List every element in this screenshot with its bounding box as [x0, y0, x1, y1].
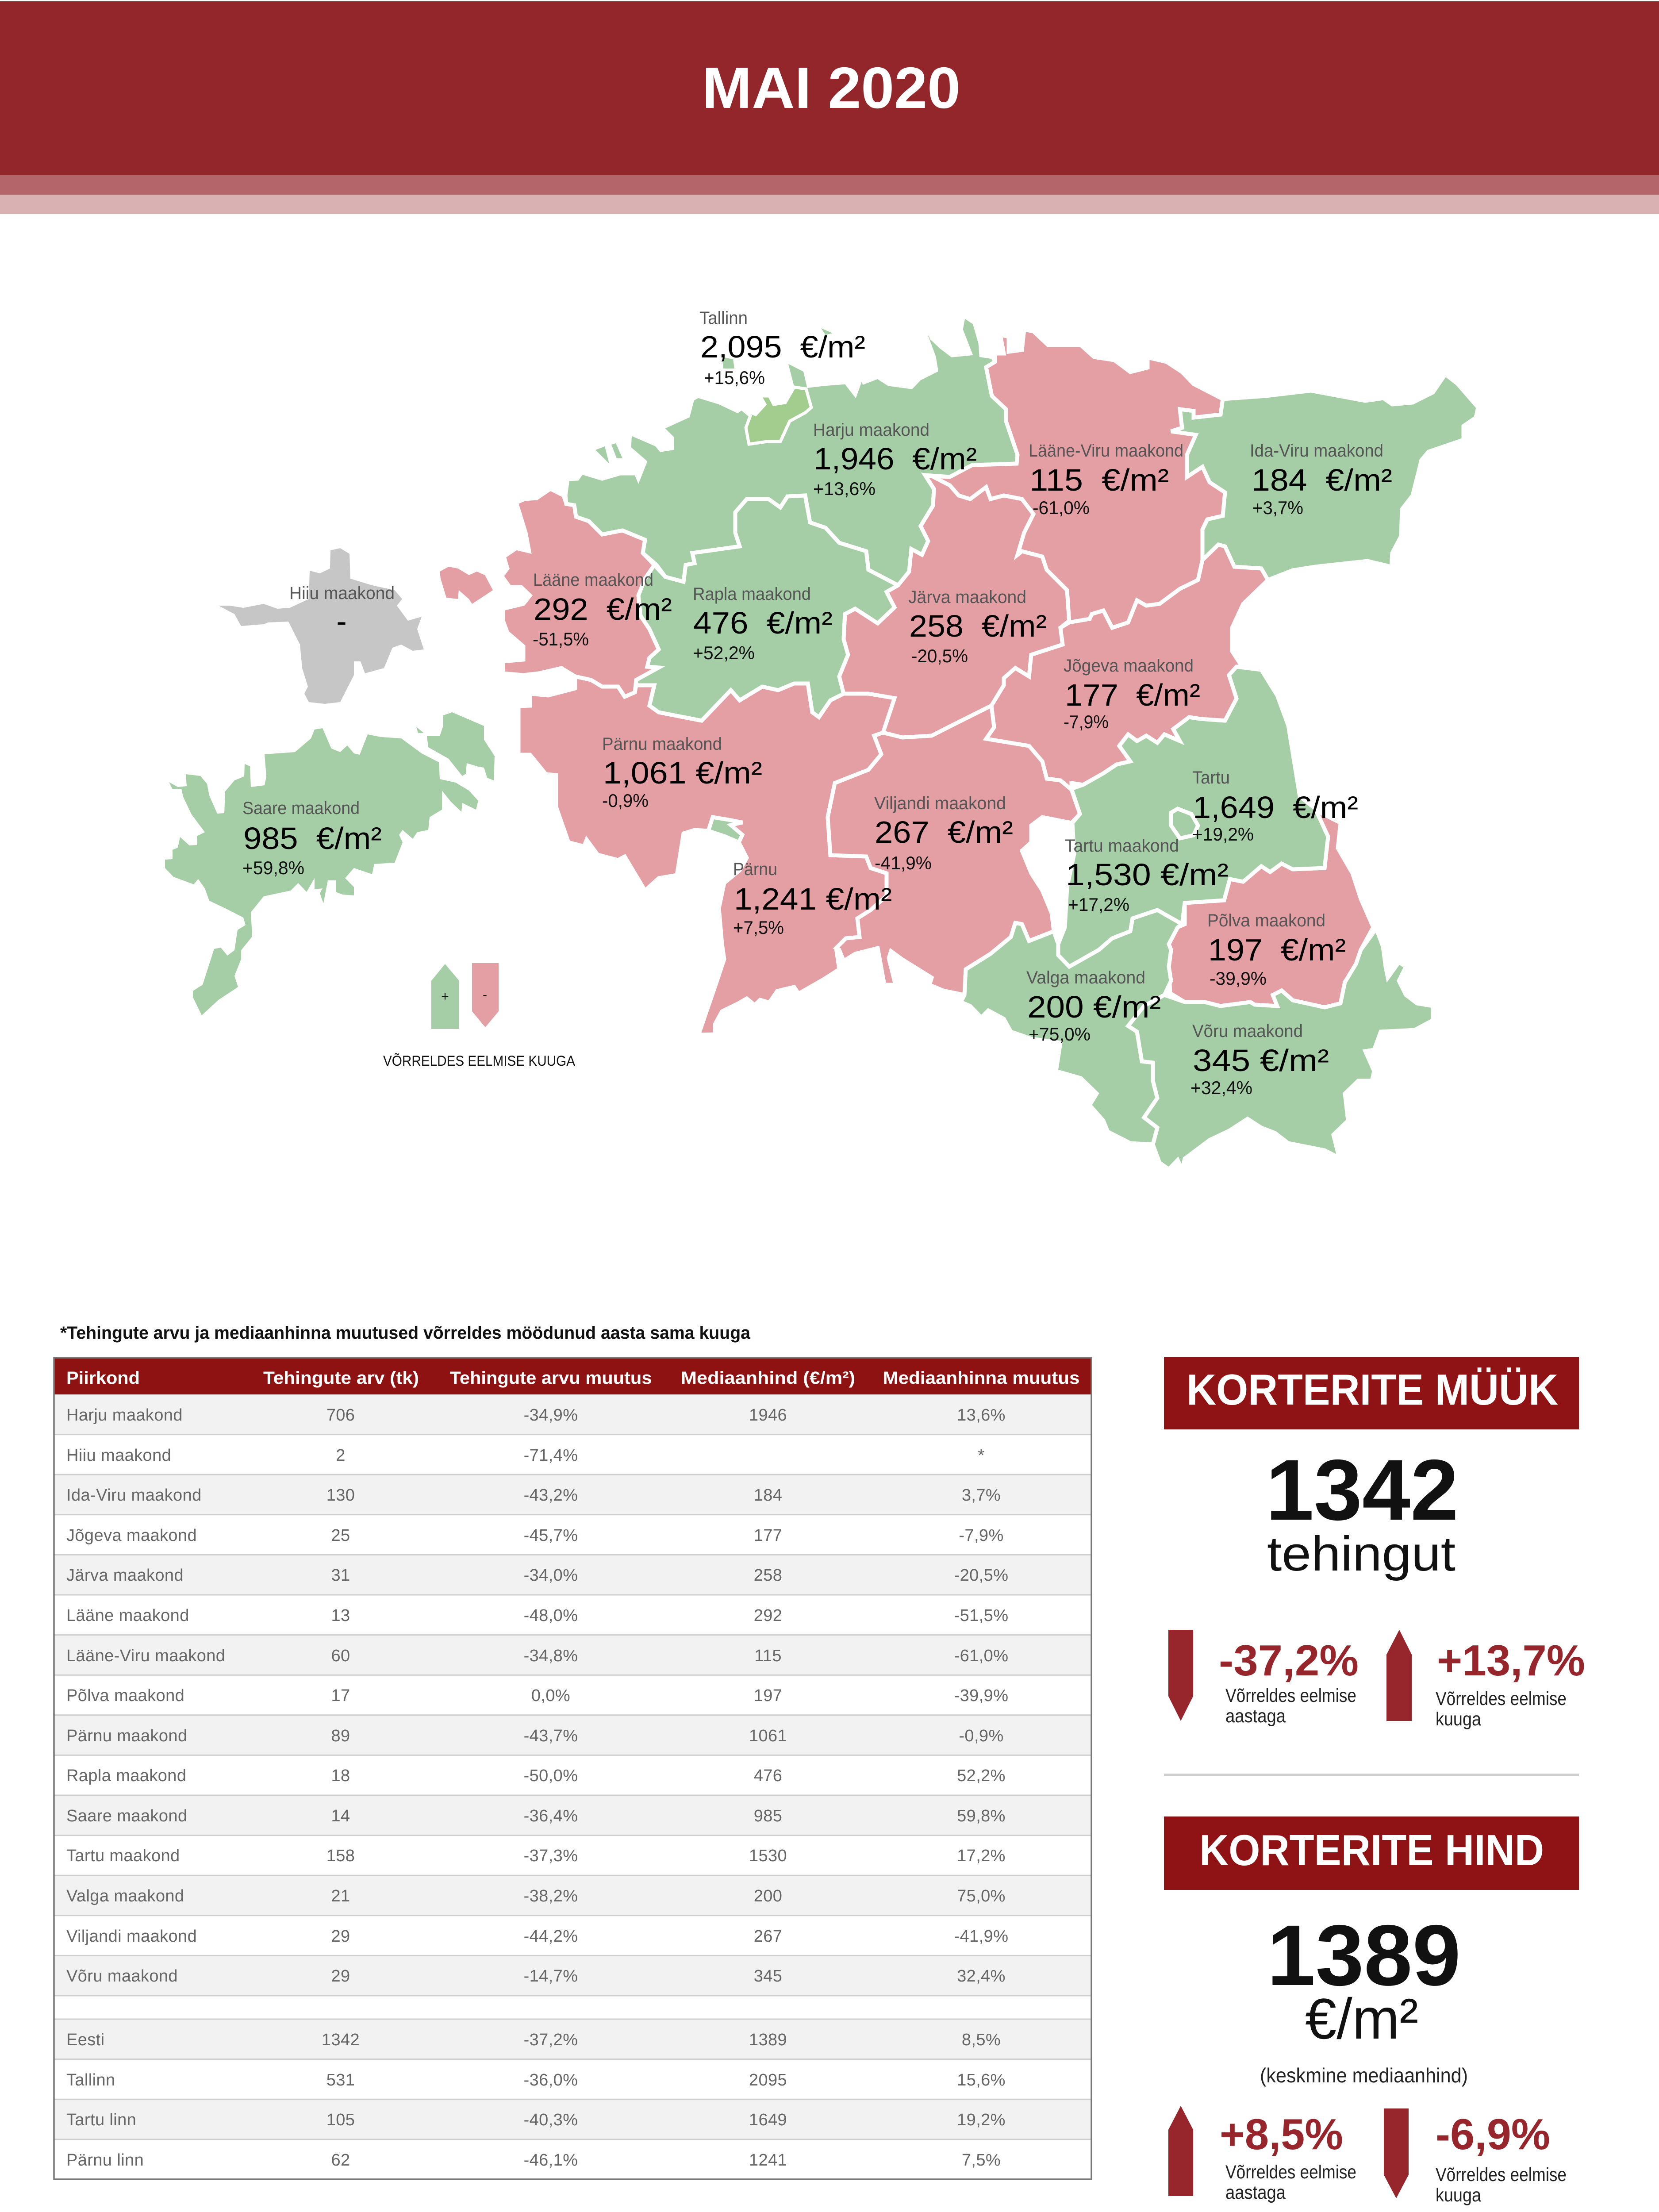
heading: KORTERITE MÜÜK: KORTERITE MÜÜK: [1187, 1365, 1558, 1414]
row: Harju maakond: 13,6%: [957, 1406, 1006, 1425]
map label: Valga: +75,0%: [1029, 1024, 1091, 1045]
stat: yearly change: Võrreldes eelmise: [1225, 1685, 1356, 1706]
row: Jõgeva maakond: Jõgeva maakond: [66, 1526, 197, 1545]
row: Pärnu maakond: -43,7%: [524, 1727, 578, 1745]
row: Rapla maakond: 476: [754, 1767, 782, 1785]
map label: Valga: [1026, 968, 1161, 1045]
row: Tartu maakond: 1530: [749, 1847, 787, 1865]
row: Hiiu maakond: Hiiu maakond: [66, 1446, 171, 1465]
icon: plus arrow: [431, 964, 459, 1029]
map label: Pärnu: 1,241 €/m²: [734, 882, 892, 916]
row: Viljandi maakond: 29: [331, 1927, 350, 1946]
row: Ida-Viru maakond: 130: [326, 1486, 355, 1505]
stat: yearly change: [1219, 1636, 1359, 1727]
row: Rapla maakond: 18: [331, 1767, 350, 1785]
row: Hiiu maakond: *: [978, 1446, 985, 1465]
county: Pärnu city: [708, 817, 742, 842]
row: Põlva maakond: [66, 1686, 1008, 1705]
map label: Tallinn: 2,095 €/m²: [700, 330, 865, 364]
map label: Valga: 200 €/m²: [1027, 990, 1161, 1024]
map label: Lääne-Viru: -61,0%: [1033, 497, 1090, 518]
stat: monthly change: kuuga: [1436, 1709, 1481, 1730]
map label: Põlva: 197 €/m²: [1208, 933, 1346, 967]
table frame: [54, 1358, 1091, 2179]
map label: Rapla: [693, 584, 833, 663]
icon: down arrow monthly: [1384, 2108, 1409, 2198]
map label: Saare: 985 €/m²: [243, 821, 382, 856]
row: Tallinn: 531: [326, 2071, 355, 2089]
row: Valga maakond: Valga maakond: [66, 1887, 184, 1905]
caption: keskmine mediaanhind: (keskmine mediaanhind): [1260, 2064, 1468, 2087]
map label: Jõgeva: Jõgeva maakond: [1064, 656, 1194, 676]
stat: yearly change: -37,2%: [1219, 1636, 1359, 1685]
map label: Pärnu: +7,5%: [733, 917, 784, 938]
county: Rapla: [636, 495, 898, 721]
map label: Hiiu: Hiiu maakond: [289, 584, 395, 603]
row: Eesti: 8,5%: [962, 2031, 1001, 2049]
row: Pärnu maakond: -0,9%: [959, 1727, 1004, 1745]
row: Valga maakond: -38,2%: [524, 1887, 578, 1905]
icon: up arrow monthly: [1386, 1630, 1412, 1721]
caption: tehingut: tehingut: [1267, 1527, 1455, 1581]
map label: Jõgeva: 177 €/m²: [1065, 678, 1200, 712]
map label: Tartu maakond: 1,530 €/m²: [1066, 857, 1229, 892]
map label: Viljandi: [874, 794, 1013, 873]
row: Pärnu linn: Pärnu linn: [66, 2151, 144, 2170]
title: MAI 2020: [702, 55, 960, 120]
row: Järva maakond: -20,5%: [954, 1566, 1008, 1585]
map label: Viljandi: Viljandi maakond: [874, 794, 1006, 813]
map label: Harju: Harju maakond: [813, 420, 929, 440]
county: Hiiu: [219, 548, 424, 704]
map label: Rapla: Rapla maakond: [693, 584, 811, 604]
legend minus sign: -: [483, 987, 487, 1002]
map label: Järva: -20,5%: [911, 645, 968, 666]
table row backgrounds: [54, 1394, 1091, 2139]
row: Järva maakond: -34,0%: [524, 1566, 578, 1585]
row: Lääne-Viru maakond: Lääne-Viru maakond: [66, 1647, 225, 1665]
map label: Pärnu: Pärnu: [733, 860, 777, 879]
row: Saare maakond: [66, 1807, 1006, 1825]
row: Eesti: Eesti: [66, 2031, 104, 2049]
row: Põlva maakond: Põlva maakond: [66, 1686, 184, 1705]
map label: Harju: +13,6%: [813, 478, 876, 499]
icon: up arrow yearly: [1168, 2106, 1193, 2196]
row: Tartu maakond: 17,2%: [957, 1847, 1006, 1865]
county: Pärnu: [518, 676, 895, 1035]
map label: Tartu: Tartu: [1192, 768, 1230, 787]
county: Viljandi: [828, 706, 1080, 995]
map label: Tartu maakond: Tartu maakond: [1065, 836, 1179, 856]
data table: [54, 1358, 1091, 2179]
row: Rapla maakond: Rapla maakond: [66, 1767, 186, 1785]
map label: Lääne: -51,5%: [533, 629, 589, 649]
row: Tartu maakond: Tartu maakond: [66, 1847, 180, 1865]
table footnote: *Tehingute arvu ja mediaanhinna muutused võrreldes möödunud aasta sama kuuga: [60, 1323, 751, 1343]
row: Harju maakond: Harju maakond: [66, 1406, 183, 1425]
map legend: [383, 963, 576, 1069]
row: Lääne-Viru maakond: 115: [754, 1647, 782, 1665]
row: Põlva maakond: 17: [331, 1686, 350, 1705]
stat: monthly change: +13,7%: [1437, 1636, 1585, 1685]
map label: Jõgeva: [1064, 656, 1200, 732]
table header: Tehingute arv (tk): [263, 1368, 419, 1388]
map label: Lääne-Viru: Lääne-Viru maakond: [1029, 441, 1183, 461]
row: Järva maakond: Järva maakond: [66, 1566, 184, 1585]
row: Lääne maakond: [66, 1606, 1008, 1625]
row: Rapla maakond: [66, 1767, 1006, 1785]
row: Tartu maakond: [66, 1847, 1006, 1865]
row: Tartu maakond: 158: [326, 1847, 355, 1865]
map label: Tallinn: +15,6%: [704, 367, 765, 388]
map label: Rapla: +52,2%: [693, 642, 755, 663]
map label: Viljandi: -41,9%: [875, 853, 932, 873]
stat: yearly price change: Võrreldes eelmise: [1225, 2162, 1356, 2183]
row: Hiiu maakond: -71,4%: [524, 1446, 578, 1465]
row: Ida-Viru maakond: -43,2%: [524, 1486, 578, 1505]
row: Pärnu linn: -46,1%: [524, 2151, 578, 2170]
row: Valga maakond: [66, 1887, 1006, 1905]
row: Viljandi maakond: 267: [754, 1927, 782, 1946]
map label: Põlva: Põlva maakond: [1207, 911, 1325, 930]
row: Hiiu maakond: [66, 1446, 985, 1465]
row: Võru maakond: -14,7%: [524, 1967, 578, 1985]
row: Valga maakond: 200: [754, 1887, 782, 1905]
panel: apartment price: [1164, 1816, 1579, 2206]
row: Lääne-Viru maakond: -61,0%: [954, 1647, 1008, 1665]
row: Tallinn: 2095: [749, 2071, 787, 2089]
map label: Pärnu: [733, 860, 892, 938]
row: Pärnu maakond: 89: [331, 1727, 350, 1745]
map label: Saare: [242, 799, 382, 878]
row: Eesti: -37,2%: [524, 2031, 578, 2049]
map label: Lääne: [533, 570, 672, 649]
row: Saare maakond: 14: [331, 1807, 350, 1825]
row: Võru maakond: 29: [331, 1967, 350, 1985]
table header: [54, 1358, 1091, 1394]
map label: Valga: Valga maakond: [1026, 968, 1145, 987]
row: Pärnu maakond: [66, 1727, 1004, 1745]
map label: Järva: Järva maakond: [908, 588, 1026, 607]
map label: Viljandi: 267 €/m²: [875, 815, 1013, 849]
row: Lääne maakond: -48,0%: [524, 1606, 578, 1625]
map label: Võru: Võru maakond: [1192, 1022, 1303, 1041]
county: Lääne: [440, 489, 659, 697]
row: Jõgeva maakond: 25: [331, 1526, 350, 1545]
map label: Võru: +32,4%: [1190, 1077, 1252, 1098]
row: Eesti: [66, 2031, 1001, 2049]
map label: Võru: [1190, 1022, 1329, 1098]
map label: Põlva: -39,9%: [1210, 968, 1267, 989]
row: Saare maakond: 59,8%: [957, 1807, 1006, 1825]
row: Lääne maakond: Lääne maakond: [66, 1606, 189, 1625]
row: Harju maakond: -34,9%: [524, 1406, 578, 1425]
row: Saare maakond: 985: [754, 1807, 782, 1825]
row: Tallinn: [66, 2071, 1006, 2089]
map label: Tartu: 1,649 €/m²: [1193, 790, 1358, 825]
row: Pärnu linn: 7,5%: [962, 2151, 1001, 2170]
map label: Pärnu maakond: [602, 734, 762, 811]
county: Võru: [1128, 929, 1433, 1170]
row: Pärnu linn: [66, 2151, 1001, 2170]
map label: Ida-Viru: 184 €/m²: [1252, 463, 1392, 497]
legend caption: VÕRRELDES EELMISE KUUGA: [383, 1053, 576, 1069]
row: Ida-Viru maakond: Ida-Viru maakond: [66, 1486, 202, 1505]
row: Järva maakond: [66, 1566, 1008, 1585]
row: Harju maakond: 1946: [749, 1406, 787, 1425]
stat: yearly change: aastaga: [1225, 1705, 1286, 1727]
row: Harju maakond: 706: [326, 1406, 355, 1425]
row: Eesti: 1342: [322, 2031, 360, 2049]
table header: Tehingute arvu muutus: [449, 1368, 652, 1388]
map label: Võru: 345 €/m²: [1193, 1043, 1329, 1078]
row: Tartu linn: [66, 2111, 1006, 2129]
row: Rapla maakond: -50,0%: [524, 1767, 578, 1785]
row: Põlva maakond: 197: [754, 1686, 782, 1705]
county: Ida-Viru: [1171, 374, 1478, 580]
row: Viljandi maakond: -44,2%: [524, 1927, 578, 1946]
row: Tartu linn: Tartu linn: [66, 2111, 136, 2129]
row: Järva maakond: 31: [331, 1566, 350, 1585]
map label: Tartu: +19,2%: [1192, 824, 1254, 845]
table header: Mediaanhind (€/m²): [681, 1368, 855, 1388]
map label: Pärnu maakond: Pärnu maakond: [602, 734, 722, 754]
row: Tallinn: -36,0%: [524, 2071, 578, 2089]
county: Tartu: [1058, 667, 1328, 967]
row: Jõgeva maakond: [66, 1526, 1004, 1545]
row: Pärnu linn: 1241: [749, 2151, 787, 2170]
map label: Hiiu: [289, 584, 395, 638]
stat: monthly change: Võrreldes eelmise: [1436, 1688, 1567, 1709]
map label: Järva: [908, 588, 1047, 666]
map label: Põlva: [1207, 911, 1346, 989]
row: Rapla maakond: 52,2%: [957, 1767, 1006, 1785]
stat: monthly price change: kuuga: [1436, 2185, 1481, 2206]
row: Tartu maakond: -37,3%: [524, 1847, 578, 1865]
stat: yearly price change: +8,5%: [1220, 2110, 1343, 2158]
row: Lääne-Viru maakond: 60: [331, 1647, 350, 1665]
row: Võru maakond: [66, 1967, 1006, 1985]
row: Lääne maakond: 13: [331, 1606, 350, 1625]
map label: Saare: +59,8%: [242, 857, 304, 878]
map label: Harju: [813, 420, 977, 499]
stat: monthly price change: [1436, 2110, 1567, 2206]
county: Järva: [839, 475, 1069, 737]
map label: Lääne-Viru: [1029, 441, 1183, 518]
row: Tartu linn: 19,2%: [957, 2111, 1006, 2129]
map label: Ida-Viru: Ida-Viru maakond: [1250, 441, 1383, 461]
row: Eesti: 1389: [749, 2031, 787, 2049]
row: Saare maakond: -36,4%: [524, 1807, 578, 1825]
map label: Jõgeva: -7,9%: [1064, 711, 1109, 732]
row: Järva maakond: 258: [754, 1566, 782, 1585]
stat: yearly price change: [1220, 2110, 1356, 2203]
row: Tallinn: Tallinn: [66, 2071, 115, 2089]
stat: monthly change: [1436, 1636, 1585, 1730]
big number 1389: 1389: [1267, 1907, 1461, 2004]
panel: apartment sales: [1164, 1357, 1585, 1730]
row: Tartu linn: 1649: [749, 2111, 787, 2129]
map label: Rapla: 476 €/m²: [693, 606, 833, 640]
icon: down arrow yearly: [1168, 1630, 1193, 1721]
county: Valga: [961, 910, 1182, 1144]
map of Estonia: [165, 315, 1478, 1170]
row: Tartu linn: 105: [326, 2111, 355, 2129]
map label: Lääne: Lääne maakond: [533, 570, 653, 590]
heading: KORTERITE HIND: KORTERITE HIND: [1199, 1826, 1544, 1874]
county: Saare: [165, 712, 495, 1015]
stat: monthly price change: Võrreldes eelmise: [1436, 2164, 1567, 2185]
big number 1342: 1342: [1266, 1442, 1459, 1538]
map label: Ida-Viru: [1250, 441, 1392, 518]
legend plus sign: +: [441, 989, 449, 1004]
map label: Ida-Viru: +3,7%: [1252, 497, 1303, 518]
row: Pärnu maakond: Pärnu maakond: [66, 1727, 187, 1745]
caption: euro per square metre: €/m²: [1305, 1986, 1418, 2051]
county: Harju: [565, 315, 1018, 585]
stat: yearly price change: aastaga: [1225, 2182, 1286, 2203]
map label: Tallinn: [699, 308, 865, 388]
row: Põlva maakond: -39,9%: [954, 1686, 1008, 1705]
county: Tartu city: [1171, 809, 1198, 838]
table header: Piirkond: [66, 1368, 140, 1388]
row: Harju maakond: [66, 1406, 1006, 1425]
map label: Tartu maakond: [1065, 836, 1229, 915]
row: Lääne-Viru maakond: [66, 1647, 1008, 1665]
row: Lääne maakond: -51,5%: [954, 1606, 1008, 1625]
stat: monthly price change: -6,9%: [1436, 2110, 1550, 2158]
row: Põlva maakond: 0,0%: [531, 1686, 570, 1705]
row: Viljandi maakond: -41,9%: [954, 1927, 1008, 1946]
row: Saare maakond: Saare maakond: [66, 1807, 187, 1825]
map label: Tallinn: Tallinn: [699, 308, 748, 328]
row: Võru maakond: 32,4%: [957, 1967, 1006, 1985]
row: Ida-Viru maakond: 184: [754, 1486, 782, 1505]
county: Lääne-Viru: [932, 330, 1225, 628]
row: Jõgeva maakond: -7,9%: [959, 1526, 1004, 1545]
county: Jõgeva: [986, 545, 1268, 790]
row: Viljandi maakond: Viljandi maakond: [66, 1927, 197, 1946]
row: Ida-Viru maakond: 3,7%: [962, 1486, 1001, 1505]
map label: Lääne-Viru: 115 €/m²: [1029, 463, 1169, 497]
map label: Saare: Saare maakond: [242, 799, 360, 818]
map label: Hiiu: -: [336, 604, 347, 638]
row: Võru maakond: Võru maakond: [66, 1967, 178, 1985]
row: Tartu linn: -40,3%: [524, 2111, 578, 2129]
map label: Tartu maakond: +17,2%: [1068, 894, 1129, 915]
row: Viljandi maakond: [66, 1927, 1008, 1946]
map label: Pärnu maakond: -0,9%: [602, 790, 649, 811]
row: Tallinn: 15,6%: [957, 2071, 1006, 2089]
row: Pärnu maakond: 1061: [749, 1727, 787, 1745]
row: Valga maakond: 75,0%: [957, 1887, 1006, 1905]
county: Tallinn: [742, 387, 811, 444]
map label: Tartu: [1192, 768, 1358, 845]
map label: Järva: 258 €/m²: [909, 609, 1047, 643]
icon: minus arrow: [472, 963, 499, 1027]
county: Põlva: [1169, 810, 1373, 1007]
heading: KORTERITE MÜÜK: [1164, 1357, 1579, 1429]
row: Võru maakond: 345: [754, 1967, 782, 1985]
row: Pärnu linn: 62: [331, 2151, 350, 2170]
map label: Harju: 1,946 €/m²: [814, 442, 977, 476]
row: Hiiu maakond: 2: [336, 1446, 346, 1465]
row: Lääne-Viru maakond: -34,8%: [524, 1647, 578, 1665]
heading: KORTERITE HIND: [1164, 1816, 1579, 1890]
row: Lääne maakond: 292: [754, 1606, 782, 1625]
map label: Pärnu maakond: 1,061 €/m²: [603, 756, 762, 790]
row: Jõgeva maakond: 177: [754, 1526, 782, 1545]
row: Valga maakond: 21: [331, 1887, 350, 1905]
row: Ida-Viru maakond: [66, 1486, 1001, 1505]
map label: Lääne: 292 €/m²: [534, 592, 672, 626]
header band: [0, 1, 1659, 214]
row: Jõgeva maakond: -45,7%: [524, 1526, 578, 1545]
table header: Mediaanhinna muutus: [883, 1368, 1079, 1388]
